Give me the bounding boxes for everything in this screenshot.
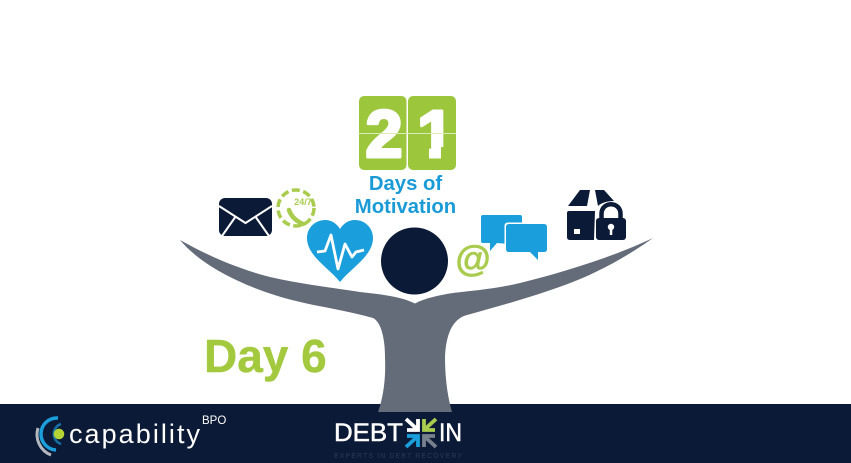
icon: heart with pulse [307, 220, 373, 282]
heading: Days of Motivation [355, 173, 456, 218]
21 flip-calendar badge: 1 [417, 97, 454, 172]
icon: at sign: @ [455, 238, 491, 279]
logo: capability BPO [37, 415, 226, 455]
heading: Days of Motivation: Days of [369, 173, 442, 195]
logo mark: converging arrows [406, 419, 436, 447]
heading: Days of Motivation: Motivation [355, 196, 456, 218]
logo word: IN: IN [439, 419, 462, 447]
icon: box with padlock [567, 190, 626, 240]
icon: envelope [219, 198, 272, 236]
icon: 24/7 phone [278, 190, 314, 226]
figure head [381, 228, 448, 294]
21 flip-calendar badge: 2 [365, 97, 403, 172]
logo suffix: BPO [202, 415, 226, 427]
logo: Debt In [334, 419, 462, 460]
logo mark: swirl [37, 418, 64, 455]
text: Day 6: Day 6 [204, 330, 327, 382]
figure body with outstretched arms [180, 238, 653, 412]
icon: 24/7 phone: 24/7 [294, 197, 312, 207]
logo tagline: EXPERTS IN DEBT RECOVERY [334, 453, 462, 460]
logo word: DEBT: DEBT [334, 419, 403, 447]
logo wordmark: capability [69, 419, 200, 449]
icon: chat bubbles [481, 215, 548, 260]
21 flip-calendar badge [359, 96, 456, 172]
footer band [0, 404, 851, 463]
